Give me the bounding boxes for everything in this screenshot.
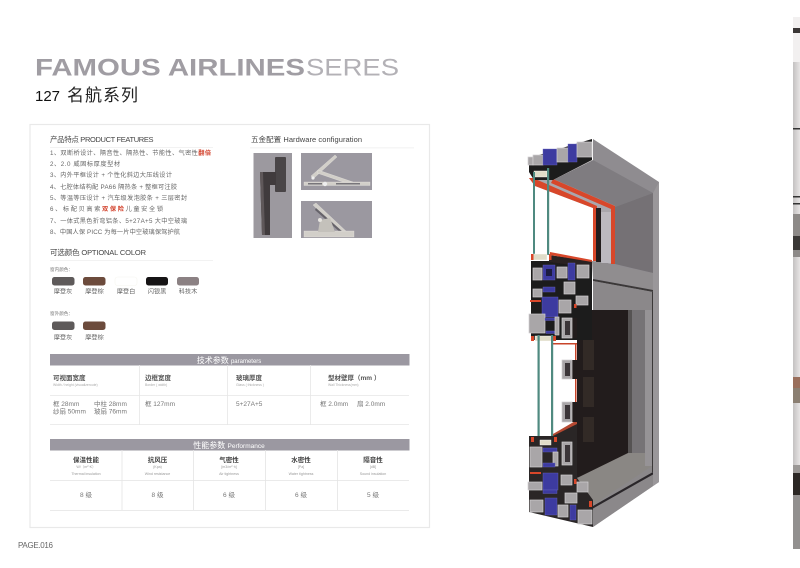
panel: optional colours: 窗外颜色： xyxy=(50,310,73,317)
column: wind resistance: Wind resistance xyxy=(145,472,170,476)
swatch: exterior brown xyxy=(83,322,106,342)
panel: optional colours xyxy=(50,247,213,342)
swatch: white xyxy=(115,277,137,296)
title xyxy=(35,54,399,105)
lower glass panes xyxy=(538,335,553,446)
panel: hardware configuration: 五金配置 Hardware configuration xyxy=(251,134,362,144)
panel: product features: 产品特点 PRODUCT FEATURES xyxy=(50,134,154,144)
panel: optional colours: 窗内颜色： xyxy=(50,266,73,273)
panel: product features: 6、标配贝高索 双保险 儿童安全锁 xyxy=(50,205,163,213)
swatch: black: 闪银黑 xyxy=(148,288,166,296)
table: technical parameters: 框 127mm xyxy=(145,399,175,408)
title: FAMOUS AIRLINES xyxy=(35,54,305,82)
panel: optional colours: 可选颜色 OPTIONAL COLOR xyxy=(50,247,147,257)
column: air tightness: Air tightness xyxy=(219,472,239,476)
table: technical parameters: Width / height (visualizeroute) xyxy=(53,383,98,387)
swatch: brown: 摩登棕 xyxy=(85,288,104,296)
swatch: tech wood: 科技木 xyxy=(179,288,197,296)
swatch: exterior grey: 摩登灰 xyxy=(54,334,72,342)
upper glass panes xyxy=(533,168,549,255)
icon: window handle xyxy=(254,153,292,238)
table: technical parameters: 玻扇 76mm xyxy=(94,406,127,416)
swatch: grey xyxy=(52,277,74,296)
table: technical parameters: 可视面宽度 xyxy=(53,373,86,382)
panel: product features: 3、内外平框设计 + 个性化斜边大压线设计 xyxy=(50,171,172,179)
swatch: tech wood xyxy=(177,277,199,296)
panel: product features: 7、一体式黑色折弯铝条、5+27A+5 大中空玻璃 xyxy=(50,217,187,225)
icon: friction stay open xyxy=(301,153,372,190)
table: technical parameters: 型材壁厚（mm ） xyxy=(328,373,380,382)
table: technical parameters: Glass ( thickness ) xyxy=(236,383,264,387)
swatch: white: 摩登白 xyxy=(117,288,135,296)
panel: hardware configuration xyxy=(250,134,414,238)
column: air tightness: [m3/m²·h] xyxy=(221,465,237,469)
column: thermal insulation: W/（m²·K） xyxy=(76,464,96,469)
title: 127 xyxy=(35,88,60,105)
casement hardware blocks xyxy=(562,318,577,465)
table: technical parameters: 框 2.0mm xyxy=(320,399,348,408)
swatch: exterior grey xyxy=(52,322,74,342)
column: thermal insulation xyxy=(71,455,101,499)
right edge photo strip xyxy=(793,17,800,549)
swatch: black xyxy=(146,277,168,296)
table: technical parameters: 5+27A+5 xyxy=(236,401,263,408)
column: thermal insulation: 8 级 xyxy=(80,490,92,499)
panel: product features: 2、2.0 威固标厚度型材 xyxy=(50,160,120,168)
table: technical parameters xyxy=(50,354,410,425)
panel: product features: 8、中国人保 PICC 为每一片中空玻璃保驾护航 xyxy=(50,228,180,236)
column: water tightness: Water tightness xyxy=(289,472,314,476)
window cross-section illustration xyxy=(528,139,659,527)
swatch: exterior brown: 摩登棕 xyxy=(85,334,104,342)
table: technical parameters: 技术参数 parameters xyxy=(197,355,261,365)
swatch: brown xyxy=(83,277,106,296)
title: SERES xyxy=(306,54,399,82)
upper frame reveal xyxy=(529,139,659,527)
column: water tightness: 水密性 xyxy=(291,455,311,464)
panel: product features: 5、等温等压设计 + 汽车级发泡胶条 + 三层密封 xyxy=(50,194,187,202)
sill section xyxy=(528,420,593,527)
column: water tightness xyxy=(289,455,314,499)
table: technical parameters: Wall Thickness(mm) xyxy=(328,383,359,387)
lower frame reveal xyxy=(577,261,653,527)
column: wind resistance: 抗风压 xyxy=(148,455,168,464)
panel: product features: 1、双断桥设计、隔音性、隔热性、节能性、气密性翻倍 xyxy=(50,149,211,157)
icon: friction stay side xyxy=(301,201,372,238)
column: sound insulation: 隔音性 xyxy=(363,455,383,464)
table: technical parameters: 玻璃厚度 xyxy=(236,373,262,382)
column: air tightness: 气密性 xyxy=(219,455,239,464)
page number: PAGE.016 xyxy=(18,541,54,550)
column: water tightness: 6 级 xyxy=(295,490,307,499)
column: thermal insulation: Thermal insulation xyxy=(71,472,101,476)
title: 名航系列 xyxy=(67,86,138,105)
column: sound insulation xyxy=(360,455,386,499)
table: technical parameters: 扇 2.0mm xyxy=(357,399,385,408)
column: wind resistance: 8 级 xyxy=(152,490,164,499)
table: technical parameters: 中柱 28mm xyxy=(94,399,127,408)
table: technical parameters: 框 28mm xyxy=(53,399,79,408)
column: sound insulation: [dB] xyxy=(370,465,376,469)
table: performance: 性能参数 Performance xyxy=(193,440,265,450)
column: sound insulation: 5 级 xyxy=(367,490,379,499)
column: wind resistance xyxy=(145,455,170,499)
column: air tightness xyxy=(219,455,239,499)
column: air tightness: 6 级 xyxy=(223,490,235,499)
column: thermal insulation: 保温性能 xyxy=(73,455,100,464)
table: technical parameters: 纱扇 50mm xyxy=(53,406,86,416)
table: technical parameters: 边框宽度 xyxy=(145,373,172,382)
swatch: grey: 摩登灰 xyxy=(54,288,72,296)
table: technical parameters: Border ( width) xyxy=(145,383,167,387)
column: wind resistance: (Kpa) xyxy=(153,465,162,469)
upper section profiles xyxy=(528,139,592,180)
column: sound insulation: Sound insulation xyxy=(360,472,386,476)
panel: product features: 4、七腔体结构配 PA66 隔热条 + 整框可注胶 xyxy=(50,183,177,191)
mullion section xyxy=(529,252,592,341)
table: performance xyxy=(50,439,410,510)
lower glazing opening xyxy=(538,343,577,445)
panel: specification card xyxy=(30,124,430,528)
column: water tightness: [Pa] xyxy=(298,465,304,469)
panel: product features xyxy=(50,134,213,236)
